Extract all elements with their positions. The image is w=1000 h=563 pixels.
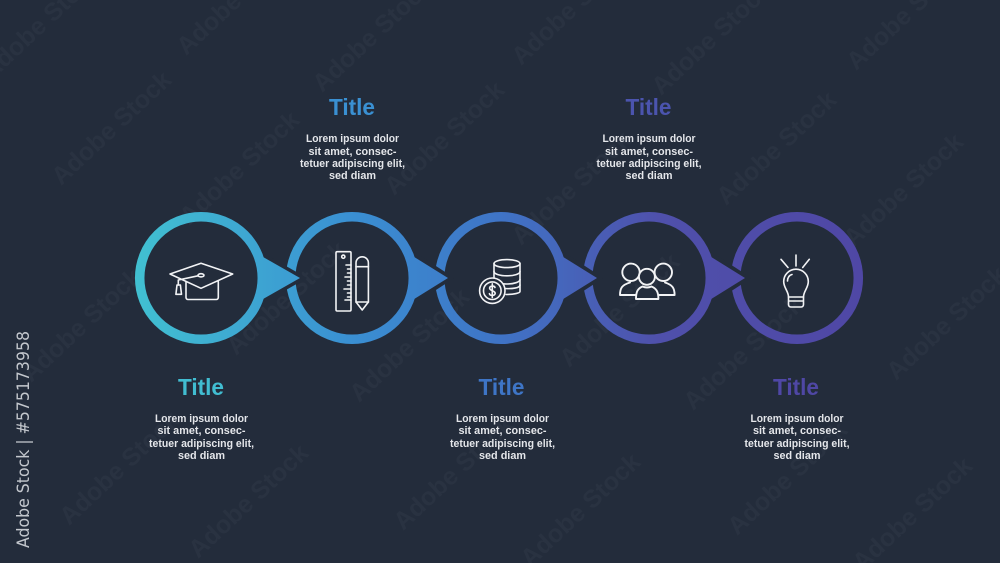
watermark pattern: Adobe Stock — [46, 66, 177, 190]
watermark pattern: Adobe Stock — [183, 439, 314, 563]
ring 1 — [140, 217, 262, 339]
watermark pattern: Adobe Stock — [722, 416, 853, 540]
text block: step 2: sit amet, consec- — [308, 146, 397, 158]
ring 5 — [736, 217, 858, 339]
text block: step 3: sit amet, consec- — [458, 425, 547, 437]
watermark pattern: Adobe Stock — [174, 106, 305, 230]
arrow 4 — [708, 255, 745, 301]
watermark pattern: Adobe Stock — [554, 248, 685, 372]
watermark pattern: Adobe Stock — [344, 283, 475, 407]
ring 4 — [588, 217, 710, 339]
text block: step 4: sed diam — [626, 170, 672, 182]
text block: step 5: Title — [773, 374, 819, 400]
text block: step 1: sed diam — [178, 450, 225, 462]
watermark pattern: Adobe Stock — [16, 263, 147, 387]
watermark pattern: Adobe Stock — [379, 76, 510, 200]
text block: step 1: sit amet, consec- — [158, 425, 246, 437]
ring 2 — [291, 217, 413, 339]
text block: step 4: Title — [626, 94, 672, 120]
watermark pattern: Adobe Stock — [678, 291, 809, 415]
watermark pattern: Adobe Stock — [711, 86, 842, 210]
text block: step 1: Lorem ipsum dolor — [155, 413, 248, 425]
text block: step 5 — [744, 374, 850, 462]
arrow 1 — [260, 255, 300, 301]
text block: step 4 — [596, 94, 702, 182]
icon: people — [620, 264, 675, 299]
stock id caption: Adobe Stock | #575173958 — [14, 331, 34, 548]
icon: ruler and pencil — [336, 252, 368, 311]
watermark pattern: Adobe Stock — [221, 236, 352, 360]
icon: coins — [480, 260, 520, 303]
text block: step 3: tetuer adipiscing elit, — [450, 438, 555, 450]
arrow 3 — [560, 255, 597, 301]
watermark pattern: Adobe Stock — [54, 406, 185, 530]
ring 3 — [440, 217, 562, 339]
text block: step 3 — [450, 374, 555, 462]
text block: step 3: Lorem ipsum dolor — [456, 413, 549, 425]
watermark pattern: Adobe Stock — [838, 128, 969, 252]
text block: step 1: Title — [178, 374, 224, 400]
text block: step 3: Title — [478, 374, 524, 400]
watermark pattern: Adobe Stock — [388, 411, 519, 535]
arrow 2 — [411, 255, 448, 301]
text block: step 4: tetuer adipiscing elit, — [596, 158, 702, 170]
text block: step 3: sed diam — [479, 450, 526, 462]
text block: step 5: tetuer adipiscing elit, — [744, 438, 850, 450]
text block: step 5: sit amet, consec- — [753, 425, 841, 437]
text block: step 5: Lorem ipsum dolor — [750, 413, 844, 425]
text block: step 4: Lorem ipsum dolor — [602, 133, 696, 145]
text block: step 4: sit amet, consec- — [605, 146, 693, 158]
text block: step 2: Title — [329, 94, 375, 120]
text block: step 2 — [300, 94, 405, 182]
icon: graduation cap — [170, 263, 233, 300]
text block: step 5: sed diam — [774, 450, 820, 462]
text block: step 1: tetuer adipiscing elit, — [149, 438, 254, 450]
text block: step 1 — [149, 374, 254, 462]
icon: light bulb — [781, 255, 809, 307]
circular flow chain — [140, 217, 858, 339]
text block: step 2: sed diam — [329, 170, 376, 182]
text block: step 2: tetuer adipiscing elit, — [300, 158, 405, 170]
watermark pattern: Adobe Stock — [506, 126, 637, 250]
text block: step 2: Lorem ipsum dolor — [306, 133, 399, 145]
